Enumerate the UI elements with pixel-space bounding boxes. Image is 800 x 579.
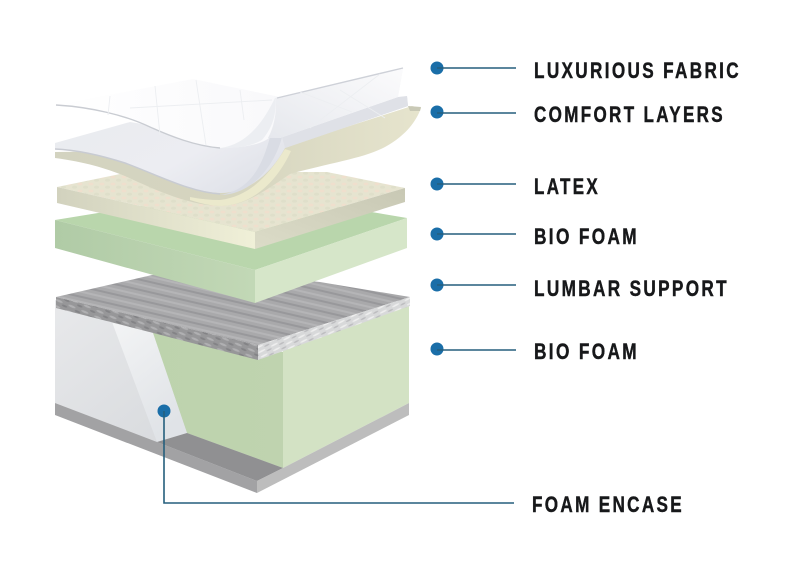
luxurious fabric sheet xyxy=(56,68,403,148)
callout: lumbar support: LUMBAR SUPPORT xyxy=(534,276,729,301)
callout: bio foam lower: BIO FOAM xyxy=(534,339,639,364)
callout: comfort layers xyxy=(430,102,725,127)
bio foam layer xyxy=(55,190,407,303)
green right panel xyxy=(283,300,409,468)
illustration: mattress cross-section xyxy=(55,68,421,493)
comfort layers: beige xyxy=(55,106,421,206)
green side panel xyxy=(150,325,283,468)
comfort layers: white foam xyxy=(55,96,408,195)
base right edge xyxy=(257,403,409,493)
base left edge xyxy=(55,403,257,493)
callout: foam encase: FOAM ENCASE xyxy=(532,492,684,517)
callout: bio foam upper: BIO FOAM xyxy=(534,224,639,249)
callout: luxurious fabric: LUXURIOUS FABRIC xyxy=(534,58,741,83)
callout: bio foam upper xyxy=(430,224,639,249)
gray floor xyxy=(157,433,283,481)
callout: latex xyxy=(430,174,600,199)
foam encase block xyxy=(55,300,409,493)
white fold flap xyxy=(112,322,187,442)
callout: lumbar support xyxy=(430,276,729,301)
callout: luxurious fabric xyxy=(430,58,741,83)
callout: bio foam lower xyxy=(430,339,639,364)
callout: latex: LATEX xyxy=(534,174,600,199)
callout: foam encase xyxy=(158,404,684,517)
lumbar support layer xyxy=(56,275,410,360)
callout: comfort layers: COMFORT LAYERS xyxy=(534,102,725,127)
latex layer xyxy=(57,172,405,249)
